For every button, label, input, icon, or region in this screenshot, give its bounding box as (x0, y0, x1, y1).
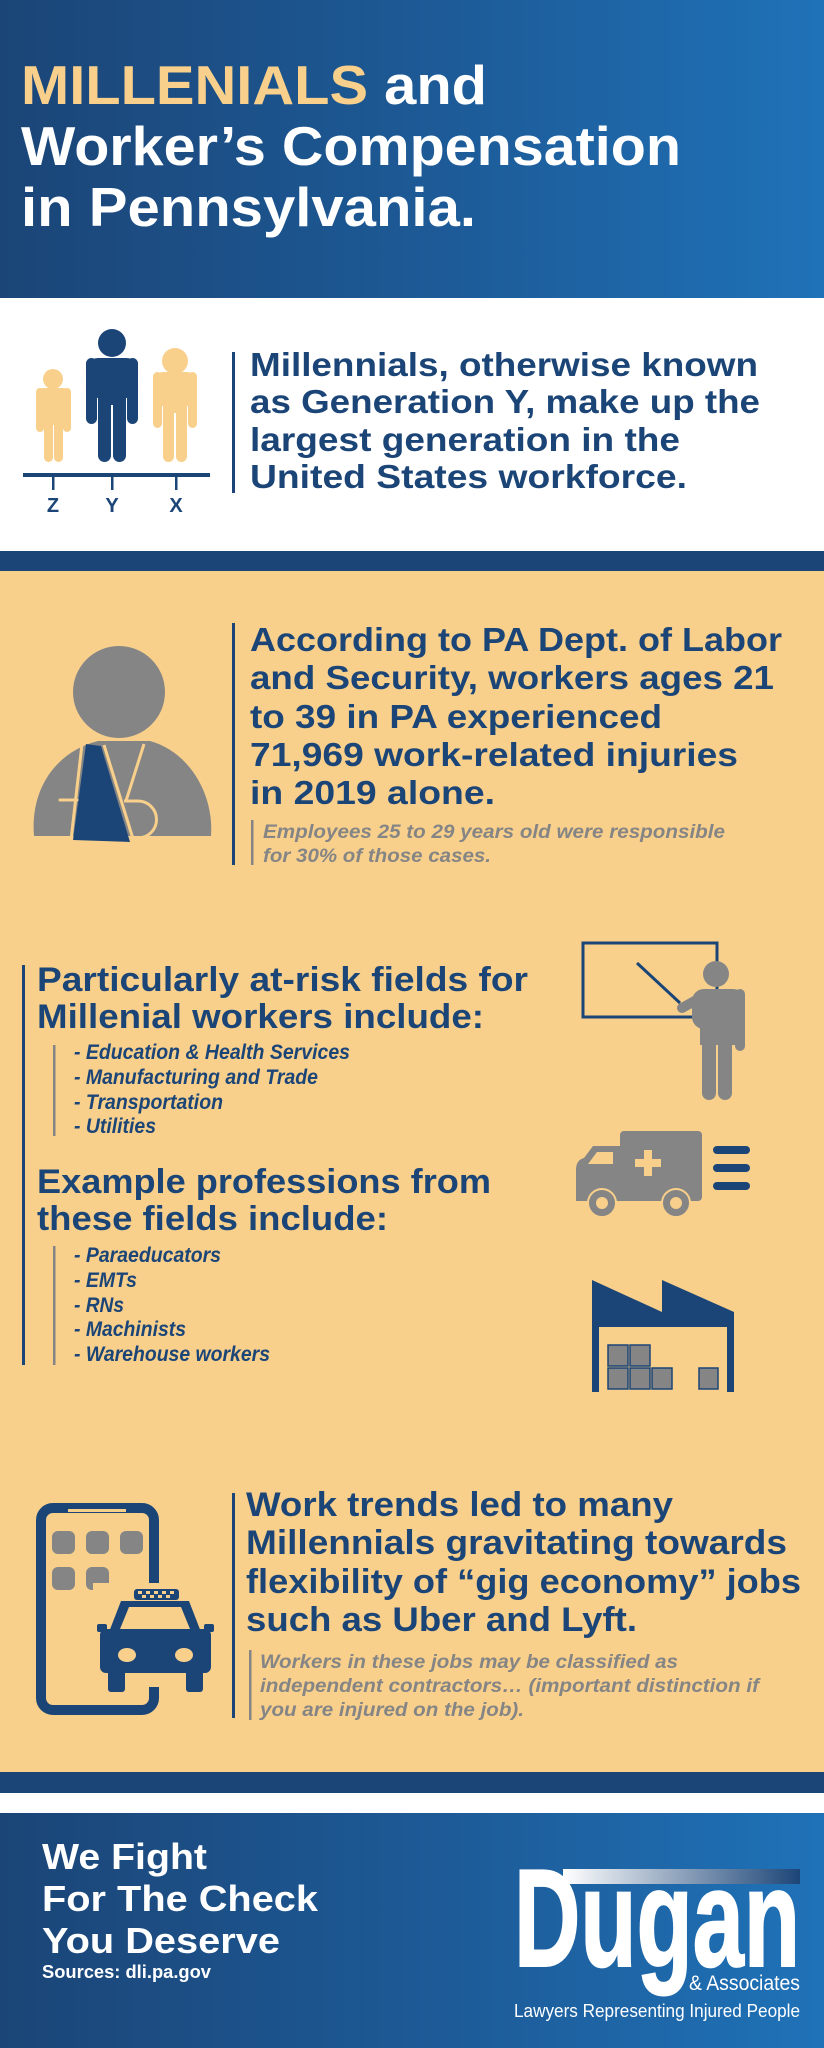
text block: injury statistic: According to PA Dept. of Labor (250, 621, 782, 658)
heading: example professions (37, 1163, 491, 1238)
list: fields: - Transportation (74, 1091, 223, 1114)
list: fields: - Manufacturing and Trade (74, 1066, 318, 1089)
text block: injury statistic (250, 621, 782, 811)
text block: generation statement: largest generation in the (250, 421, 680, 458)
title: Worker’s Compensation (21, 115, 681, 177)
icon: generation figures: X (169, 495, 183, 517)
slogan: For The Check (42, 1878, 319, 1919)
list: professions: - Machinists (74, 1318, 186, 1341)
note: employees 25 to 29: Employees 25 to 29 years old were responsible (263, 822, 725, 843)
note: independent contractors: you are injured on the job). (259, 1700, 524, 1721)
list: professions: - Warehouse workers (74, 1343, 270, 1366)
logo: Dugan & Associates: & Associates (689, 1972, 800, 1995)
text block: injury statistic: in 2019 alone. (250, 774, 495, 811)
slogan: We Fight (42, 1836, 207, 1877)
slogan (42, 1836, 319, 1982)
list: fields: - Education & Health Services (74, 1041, 350, 1064)
text block: gig economy: Millennials gravitating towards (246, 1524, 787, 1562)
icon: generation figures (23, 329, 210, 517)
text block: injury statistic: to 39 in PA experienced (250, 698, 662, 735)
panel: generations (0, 298, 824, 551)
list: fields (74, 1041, 350, 1138)
panel: tan content (0, 571, 824, 1772)
note: independent contractors (259, 1652, 761, 1721)
note: independent contractors: Workers in these jobs may be classified as (260, 1652, 678, 1673)
icon: phone with taxi (41, 1508, 218, 1710)
slogan: Sources: dli.pa.gov (42, 1962, 211, 1982)
text block: generation statement (250, 346, 760, 495)
icon: generation figures: Y (105, 495, 119, 517)
slogan: You Deserve (42, 1920, 280, 1961)
note: independent contractors: independent contractors… (important distinction if (260, 1676, 761, 1697)
header panel (0, 0, 824, 298)
text block: gig economy: flexibility of “gig economy” jobs (246, 1563, 801, 1601)
icon: generation figures: Z (47, 495, 59, 517)
text block: injury statistic: and Security, workers ages 21 (250, 659, 774, 696)
note: employees 25 to 29: for 30% of those cases. (263, 846, 491, 867)
text block: generation statement: as Generation Y, make up the (250, 383, 760, 420)
heading: at-risk fields (37, 961, 528, 1036)
icon: teacher at board (583, 943, 745, 1100)
heading: example professions: these fields include: (37, 1200, 388, 1238)
title (21, 54, 681, 238)
logo: Dugan & Associates: Lawyers Representing Injured People (514, 2001, 800, 2021)
text block: gig economy: such as Uber and Lyft. (246, 1601, 637, 1639)
text block: generation statement: United States workforce. (250, 458, 687, 495)
note: employees 25 to 29 (263, 822, 725, 867)
icon: warehouse (592, 1280, 734, 1392)
heading: example professions: Example professions from (37, 1163, 491, 1201)
icon: ambulance (576, 1131, 750, 1217)
list: fields: - Utilities (74, 1115, 156, 1138)
title: in Pennsylvania. (21, 176, 476, 238)
icon: injured person (34, 646, 211, 842)
text block: injury statistic: 71,969 work-related injuries (250, 736, 738, 773)
text block: gig economy: Work trends led to many (246, 1486, 673, 1524)
text block: gig economy (246, 1486, 801, 1639)
footer panel (0, 1813, 824, 2048)
list: professions: - Paraeducators (74, 1244, 221, 1267)
list: professions: - RNs (74, 1294, 124, 1317)
list: professions (74, 1244, 270, 1366)
heading: at-risk fields: Millenial workers include: (37, 998, 484, 1036)
heading: at-risk fields: Particularly at-risk fields for (37, 961, 528, 999)
title: MILLENIALS and (21, 54, 487, 116)
list: professions: - EMTs (74, 1269, 137, 1292)
text block: generation statement: Millennials, otherwise known (250, 346, 758, 383)
